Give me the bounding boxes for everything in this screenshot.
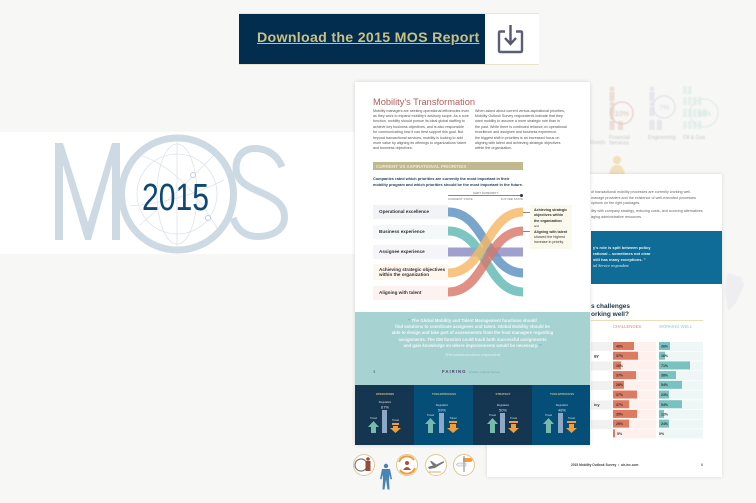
bar chart: challenges versus working well: 38% bbox=[661, 374, 669, 378]
band: achieving strategic objectives bbox=[448, 212, 523, 273]
panel 1: OPERATIONS bbox=[376, 392, 394, 396]
body text right: the past. While there is continued reliance on operational bbox=[475, 125, 567, 129]
stat: 7 percent: 7% bbox=[659, 105, 669, 112]
row: aligning with talent bbox=[373, 286, 448, 300]
intro text: options on the right packages. bbox=[591, 201, 640, 205]
body text left: for communicating how it can best support this goal. But bbox=[373, 130, 463, 134]
band: assignee experience bbox=[448, 248, 523, 256]
shift axis bbox=[448, 191, 523, 201]
body text right: within the organization. bbox=[475, 146, 512, 150]
future state label: FUTURE STATE bbox=[501, 197, 523, 201]
intro text: of transactional mobility processes are currently working well. bbox=[591, 190, 691, 194]
body text right: excellence and assignee and business experience, bbox=[475, 130, 557, 134]
panel 2: Travel bbox=[427, 413, 434, 417]
body text left: Mobility managers are seeking operational efficiencies even bbox=[373, 108, 469, 112]
bar chart: challenges versus working well bbox=[591, 342, 703, 438]
divider bbox=[591, 320, 703, 321]
footer wordmark: FAIRING Mobility Outlook Survey bbox=[442, 369, 500, 374]
band: operational excellence bbox=[448, 212, 523, 273]
year 2015: 2015 bbox=[142, 177, 209, 219]
sankey chart bbox=[448, 208, 523, 296]
body text right: aligning with talent and achieving strategic objectives bbox=[475, 141, 560, 145]
footer text: 2015 Mobility Outlook Survey • air-inc.com bbox=[571, 463, 638, 467]
quote text bbox=[392, 318, 553, 348]
icon: standing person bbox=[380, 464, 392, 490]
row: operational excellence: Operational excellence bbox=[379, 209, 429, 214]
stat: 16 percent bbox=[690, 99, 718, 127]
teal quote panel bbox=[355, 312, 590, 385]
icon: circular arrows with person bbox=[396, 454, 418, 476]
row: business experience bbox=[373, 225, 448, 239]
report page 2 bbox=[487, 174, 722, 477]
bar chart: challenges versus working well: 12% bbox=[661, 412, 669, 416]
panel 2: Travel bbox=[449, 416, 457, 420]
stat: 10 percent bbox=[611, 102, 633, 124]
axis label: SHIFT IN PRIORITY bbox=[473, 191, 499, 195]
panel 4: Travel bbox=[568, 416, 575, 420]
section heading text: CURRENT VS ASPIRATIONAL PRIORITIES bbox=[376, 164, 466, 168]
icon: airplane bbox=[426, 454, 446, 476]
bar chart: challenges versus working well: 16% bbox=[661, 354, 669, 358]
intro text bbox=[591, 190, 703, 219]
row: achieving strategic objectives: Achieving strategic objectives bbox=[379, 267, 445, 272]
row labels bbox=[373, 205, 448, 300]
panel 3: 50% bbox=[499, 408, 507, 412]
intro text: ility with company strategy, reducing costs, and sourcing alternatives bbox=[591, 209, 703, 213]
category labels: Goods bbox=[590, 140, 606, 146]
quote text: assignments. The GM function could track both successful assignments bbox=[398, 337, 547, 342]
callout text: the organization bbox=[534, 219, 562, 223]
body text left: function, mobility should pursue its ideal global staffing to bbox=[373, 119, 465, 123]
callout bbox=[530, 205, 572, 249]
callout text bbox=[534, 208, 568, 244]
quote text: “ The Global Mobility and Talent Management functions should bbox=[408, 318, 537, 323]
globe lines bbox=[130, 142, 224, 246]
question text bbox=[373, 176, 523, 187]
body text right bbox=[475, 108, 567, 150]
panel 4: Regulation bbox=[556, 403, 569, 407]
panel 1: Travel bbox=[370, 416, 377, 420]
bar chart: challenges versus working well: 46% bbox=[616, 344, 624, 348]
challenges label: CHALLENGES bbox=[613, 324, 641, 329]
bar chart: challenges versus working well: 54% bbox=[661, 403, 669, 407]
quote text: ial Service respondent bbox=[593, 263, 629, 268]
intro text: manage providers and the existence of well-executed processes bbox=[591, 196, 696, 200]
faded background infographic bbox=[590, 86, 743, 309]
panel 1: Regulation bbox=[379, 400, 392, 404]
quote text: y's role is split between policy bbox=[593, 245, 650, 250]
panel 3: STRATEGY bbox=[495, 392, 511, 396]
intro text: aging administrative resources. bbox=[591, 215, 642, 219]
icon: signpost bbox=[454, 454, 474, 476]
banner link text: Download the 2015 MOS Report bbox=[257, 30, 480, 46]
band: aligning with talent bbox=[448, 231, 523, 292]
people: engineering bbox=[650, 86, 662, 130]
white background band behind logo bbox=[0, 132, 360, 254]
stat: 16 percent: 16% bbox=[697, 111, 711, 118]
category labels: Financial bbox=[609, 135, 630, 141]
callout text: objectives within bbox=[534, 213, 563, 217]
panel 4: 48% bbox=[558, 408, 566, 412]
bar chart: challenges versus working well: 35% bbox=[616, 412, 624, 416]
download banner bbox=[239, 14, 539, 64]
bar chart: challenges versus working well: 54% bbox=[661, 383, 669, 387]
quote text: able to design and take part of assessments from the host managers regarding bbox=[392, 330, 553, 335]
bar chart: challenges versus working well: 37% bbox=[616, 403, 624, 407]
bar chart: challenges versus working well: 71% bbox=[661, 364, 669, 368]
body text left: achieve key business objectives, and is also responsible bbox=[373, 125, 464, 129]
page title: Mobility's Transformation bbox=[373, 97, 475, 107]
stat: 7 percent bbox=[653, 96, 675, 118]
people: oil and gas bbox=[683, 86, 706, 129]
row: aligning with talent: Aligning with talent bbox=[379, 290, 421, 295]
category labels: Oil & Gas bbox=[683, 135, 706, 141]
people: financial services bbox=[610, 86, 623, 130]
orange person bbox=[609, 156, 625, 176]
chart heading: s challenges bbox=[591, 303, 630, 310]
band: business experience bbox=[448, 231, 523, 292]
callout leader lines bbox=[523, 212, 530, 213]
stat: 10 percent: 10% bbox=[615, 111, 629, 118]
panel 2: 59% bbox=[438, 408, 446, 412]
callout text: Aligning with talent bbox=[534, 230, 567, 234]
row: assignee experience bbox=[373, 245, 448, 259]
icon: globe and person bbox=[354, 454, 374, 476]
letter S bbox=[233, 148, 284, 236]
body text right: the biggest shift in priorities is an increased focus on bbox=[475, 136, 559, 140]
row: business experience: Business experience bbox=[379, 229, 425, 234]
panel 3: Regulation bbox=[497, 403, 510, 407]
bar chart: challenges versus working well: 37% bbox=[616, 354, 624, 358]
panel 2: Regulation bbox=[436, 403, 449, 407]
bar chart: challenges versus working well: 23% bbox=[661, 393, 669, 397]
page number: 6 bbox=[701, 462, 703, 467]
bar chart: challenges versus working well: 26% bbox=[616, 422, 624, 426]
panel 4: Travel bbox=[545, 413, 552, 417]
current state label: CURRENT STATE bbox=[448, 197, 473, 201]
body text left: as they work to expand mobility's advisory scope. As a core bbox=[373, 114, 469, 118]
quote text: find solutions to coordinate assignees and talent. Global Mobility should be bbox=[395, 324, 550, 329]
working well label: WORKING WELL bbox=[659, 324, 692, 329]
panel 2: TOOLS/PROCESS bbox=[432, 392, 456, 396]
letter O bbox=[122, 138, 234, 250]
quote text: and gain knowledge on where improvements would be necessary. ” bbox=[404, 343, 541, 348]
bar chart: challenges versus working well: 5% bbox=[617, 432, 623, 436]
bar chart: challenges versus working well: 0% bbox=[659, 432, 665, 436]
MOS 2015 logo bbox=[55, 134, 288, 254]
panel 1 bbox=[355, 385, 414, 445]
body text right: When asked about current versus aspirational priorities, bbox=[475, 108, 565, 112]
bar chart: challenges versus working well: 24% bbox=[661, 422, 669, 426]
bar chart: challenges versus working well: 26% bbox=[661, 344, 669, 348]
bar chart: challenges versus working well: 37% bbox=[616, 393, 624, 397]
section heading bar bbox=[373, 162, 523, 170]
icon row bbox=[353, 454, 475, 490]
row: achieving strategic objectives bbox=[373, 264, 448, 280]
blue quote panel bbox=[591, 231, 722, 284]
bar chart: challenges versus working well: 26% bbox=[616, 383, 624, 387]
banner label bbox=[239, 14, 485, 64]
callout text: increase in priority. bbox=[534, 240, 564, 244]
row: assignee experience: Assignee experience bbox=[379, 249, 425, 254]
body text left: more value by aligning its offerings to organizations' talent bbox=[373, 141, 466, 145]
navy stat panels bbox=[355, 385, 590, 445]
body text left: and business objectives. bbox=[373, 146, 413, 150]
icon: download bbox=[498, 25, 524, 54]
quote text: still has many exceptions. ” bbox=[593, 257, 646, 262]
page number: 3 bbox=[373, 369, 375, 374]
bar chart: challenges versus working well: icy bbox=[594, 402, 600, 407]
row: operational excellence bbox=[373, 205, 448, 219]
row: achieving strategic objectives: within the organization bbox=[379, 272, 429, 277]
bar chart: challenges versus working well: gy bbox=[594, 353, 599, 358]
callout text: and bbox=[534, 224, 539, 228]
axis arrow bbox=[520, 194, 523, 197]
quote text bbox=[593, 245, 651, 268]
body text left: beyond transactional services, mobility is looking to add bbox=[373, 136, 463, 140]
quote text: rational – sometimes not clear bbox=[593, 251, 651, 256]
category labels: Engineering bbox=[648, 135, 676, 141]
callout text: showed the highest bbox=[534, 235, 565, 239]
pale map shape bbox=[725, 273, 744, 311]
panel 3 bbox=[473, 385, 532, 445]
panel 3: Travel bbox=[489, 413, 496, 417]
panel 4 bbox=[532, 385, 590, 445]
report page 1 bbox=[355, 82, 590, 445]
panel 2 bbox=[414, 385, 473, 445]
panel 1: 67% bbox=[381, 404, 389, 410]
category labels bbox=[590, 135, 706, 146]
quote attribution: Telecommunications respondent bbox=[445, 352, 500, 357]
letter M bbox=[55, 143, 120, 240]
body text right: Mobility Outlook Survey respondents indicate that they bbox=[475, 114, 563, 118]
question text: mobility program and which priorities should be the most important in the future. bbox=[373, 182, 523, 187]
body text right: want mobility to assume a more strategic role than in bbox=[475, 119, 560, 123]
chart heading: orking well? bbox=[591, 310, 629, 318]
bar chart: challenges versus working well: 16% bbox=[616, 364, 624, 368]
panel 4: TOOLS/PROCESS bbox=[550, 392, 574, 396]
callout text: Achieving strategic bbox=[534, 208, 567, 212]
panel 1: Travel bbox=[392, 418, 399, 422]
chart heading bbox=[591, 303, 630, 318]
body text left bbox=[373, 108, 470, 150]
category labels: Services bbox=[609, 140, 629, 146]
panel 3: Travel bbox=[510, 416, 517, 420]
question text: Companies rated which priorities are currently the most important in their bbox=[373, 176, 509, 181]
bar chart: challenges versus working well: 37% bbox=[616, 374, 624, 378]
